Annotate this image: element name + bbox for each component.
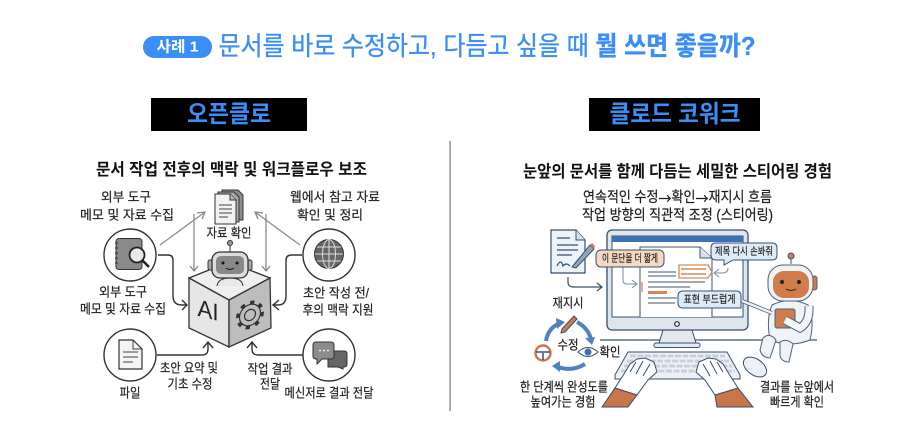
arrows: to document icon — [160, 212, 300, 271]
icon: chat circle — [303, 329, 355, 381]
title banner: 사례 1 — [156, 38, 198, 56]
left panel heading: 문서 작업 전후의 맥락 및 워크플로우 보조 — [96, 160, 367, 179]
caption: step by step: 한 단계씩 완성도를 — [520, 380, 608, 394]
title banner: 문서를 바로 수정하고, 다듬고 싶을 때 뭘 쓰면 좋을까? — [218, 31, 756, 61]
label: external tools lower: 외부 도구 — [99, 284, 147, 300]
AI cube: AI — [198, 295, 218, 327]
label: summary and edit: 초안 요약 및 — [160, 360, 218, 376]
keyboard — [615, 352, 740, 379]
icon: file circle — [104, 329, 156, 381]
cycle diagram — [536, 316, 620, 372]
subheading: 작업 방향의 직관적 조정 (스티어링) — [582, 207, 773, 224]
icon: pencil — [561, 316, 577, 333]
label: web references: 확인 및 정리 — [297, 208, 363, 222]
arrow: doc to screen — [568, 277, 602, 291]
subheading: 연속적인 수정→확인→재지시 흐름 — [583, 188, 772, 208]
label: file: 파일 — [120, 386, 140, 400]
label: external tools top — [80, 190, 174, 222]
speech bubble: shorten paragraph — [596, 250, 664, 267]
label: check: 확인 — [600, 344, 620, 360]
speech bubble: soften expression — [678, 291, 741, 308]
speech bubble: revise title: 제목 다시 손봐줘 — [715, 246, 773, 258]
speech bubble: revise title — [711, 243, 777, 265]
label: context support — [302, 286, 374, 318]
icon: document stack — [215, 190, 243, 224]
panel: OpenClaw workflow diagram — [80, 160, 380, 400]
subheading — [582, 188, 773, 224]
label: external tools top: 외부 도구 — [101, 190, 151, 204]
label: summary and edit — [160, 360, 218, 392]
right panel heading: 눈앞의 문서를 함께 다듬는 세밀한 스티어링 경험 — [523, 162, 832, 181]
robot assistant — [742, 253, 817, 362]
label: messenger: 메신저로 결과 전달 — [284, 386, 374, 400]
right panel label: Claude Cowork — [589, 98, 760, 131]
icon: eye — [578, 348, 598, 356]
label: context support: 후의 맥락 지원 — [302, 302, 374, 318]
label: edit: 수정 — [558, 338, 578, 352]
label: deliver result: 전달 — [260, 376, 280, 392]
speech bubble: soften expression: 표현 부드럽게 — [684, 292, 736, 306]
table line — [600, 339, 817, 341]
monitor — [607, 230, 748, 348]
icon: signed document — [551, 230, 595, 273]
label: summary and edit: 기초 수정 — [168, 376, 212, 392]
left panel label: OpenClaw: 오픈클로 — [187, 101, 271, 128]
caption: step by step: 높여가는 경험 — [530, 394, 596, 410]
cycle arrows — [546, 318, 595, 372]
document on screen — [623, 247, 728, 317]
label: external tools lower: 메모 및 자료 수집 — [80, 302, 166, 316]
label: web references — [290, 190, 380, 222]
mouse — [740, 353, 770, 381]
hands typing — [602, 358, 753, 407]
caption: quick check — [760, 380, 834, 410]
label: external tools lower — [80, 284, 166, 316]
label: external tools top: 메모 및 자료 수집 — [80, 208, 174, 222]
label: check materials: 자료 확인 — [206, 226, 252, 240]
right panel label: Claude Cowork: 클로드 코워크 — [610, 101, 740, 128]
robot and AI cube — [189, 240, 271, 347]
left panel label: OpenClaw — [151, 98, 307, 131]
panel divider — [450, 141, 451, 411]
caption: step by step — [520, 380, 608, 410]
panel: Claude Cowork steering diagram — [520, 162, 834, 410]
speech bubble: shorten paragraph: 이 문단을 더 짧게 — [602, 252, 658, 264]
caption: quick check: 빠르게 확인 — [770, 394, 824, 410]
icon: steering wheel — [536, 346, 550, 360]
label: web references: 웹에서 참고 자료 — [290, 190, 380, 204]
label: context support: 초안 작성 전/ — [303, 286, 369, 300]
robot head — [208, 240, 252, 286]
label: deliver result: 작업 결과 — [248, 362, 293, 376]
caption: quick check: 결과를 눈앞에서 — [760, 380, 834, 394]
label: reinstruct: 재지시 — [552, 296, 584, 310]
connectors to AI cube — [157, 255, 303, 355]
icon: notebook circle — [104, 229, 156, 281]
icon: globe circle — [303, 229, 355, 281]
label: deliver result — [248, 362, 293, 392]
